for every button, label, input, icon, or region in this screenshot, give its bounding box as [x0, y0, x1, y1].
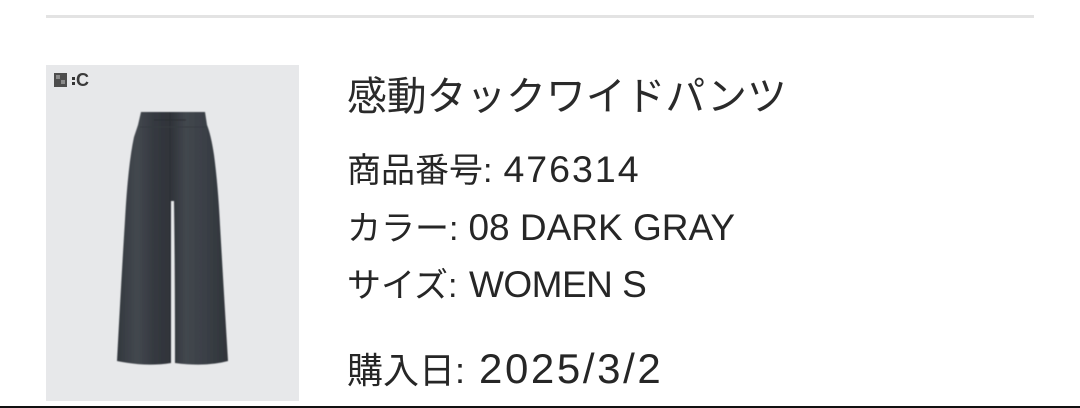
top divider: [46, 15, 1034, 18]
bottom border: [0, 406, 1080, 408]
product title: 感動タックワイドパンツ: [347, 75, 787, 119]
color: カラー: 08 DARK GRAY: [347, 207, 735, 248]
product photo: wide pants: [116, 111, 229, 366]
icon: brand logo: C: [76, 70, 89, 90]
size: サイズ: WOMEN S: [347, 264, 646, 305]
product image panel: [46, 65, 299, 401]
item number: 商品番号: 476314: [347, 148, 641, 190]
icon: brand logo: [54, 70, 89, 90]
purchase date: 購入日: 2025/3/2: [347, 345, 663, 392]
